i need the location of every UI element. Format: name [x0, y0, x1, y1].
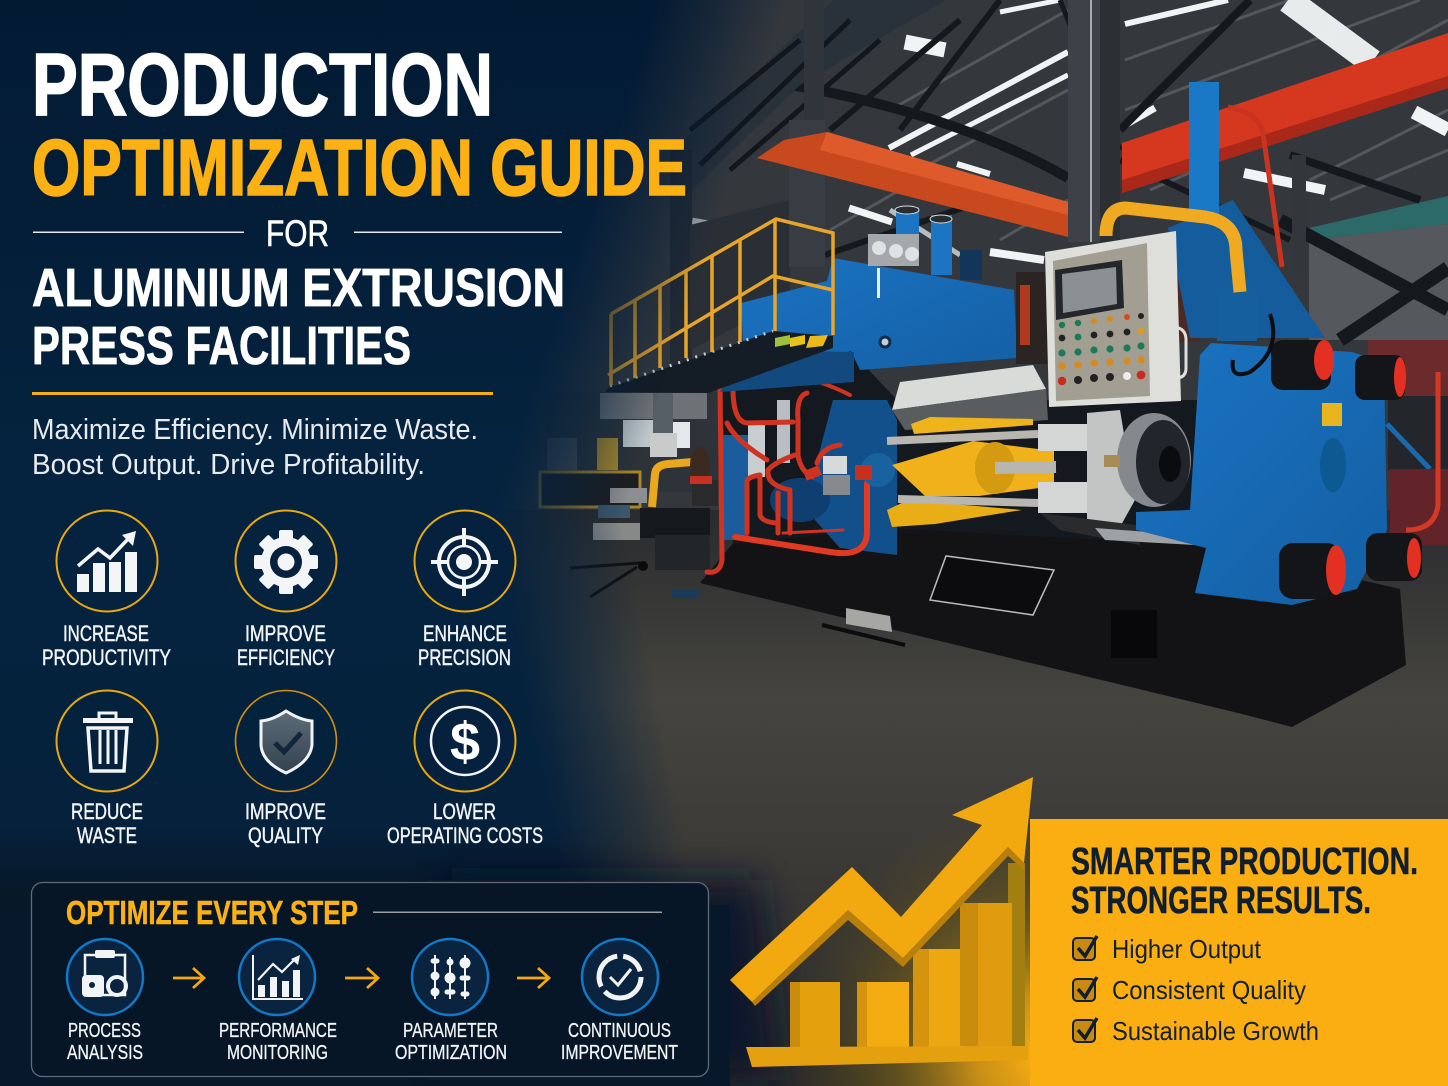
panel: yellow results [1030, 819, 1448, 1086]
benefit: lower operating costs [387, 690, 543, 848]
steel columns [789, 0, 1306, 275]
subtitle [32, 414, 478, 481]
control panel [1045, 231, 1186, 407]
icon: rising bar chart [77, 531, 137, 592]
arrow [345, 968, 378, 988]
teal wall band [1309, 196, 1448, 240]
right blue housing [1136, 343, 1387, 605]
black hose [1233, 314, 1273, 374]
red banner beam [1122, 33, 1448, 193]
benefit: improve quality: QUALITY [248, 823, 323, 848]
arrow underside shading [752, 847, 1024, 1006]
blue vertical cylinders and gauges [868, 206, 982, 280]
bars [790, 903, 1012, 1048]
subtitle: Maximize Efficiency. Minimize Waste. [32, 414, 478, 446]
benefit: improve efficiency: EFFICIENCY [237, 645, 335, 670]
benefit: increase productivity: PRODUCTIVITY [42, 645, 171, 670]
step: performance monitoring: MONITORING [227, 1042, 328, 1064]
step: parameter optimization: OPTIMIZATION [395, 1042, 507, 1064]
background equipment on the left side of the hall [540, 340, 1448, 598]
benefit: enhance precision: ENHANCE [423, 621, 507, 646]
benefit: improve efficiency [236, 510, 336, 670]
access platform with railing [606, 219, 854, 393]
roof panels and lights [670, 0, 1448, 410]
step: parameter optimization: PARAMETER [403, 1020, 498, 1042]
step: continuous improvement: CONTINUOUS [568, 1020, 671, 1042]
icon: cycle with check [599, 956, 641, 998]
yellow crosshead [887, 417, 1054, 527]
benefit: lower operating costs: LOWER [433, 799, 496, 824]
base plate [746, 1046, 1028, 1067]
white carriage [892, 365, 1046, 410]
yellow overhead pipe [1106, 208, 1240, 292]
step: performance monitoring [219, 939, 337, 1064]
benefit: increase productivity: INCREASE [63, 621, 149, 646]
growth arrow and bars [730, 777, 1033, 1067]
upper blue block [741, 258, 1017, 380]
blue strut and top piston [1168, 82, 1325, 341]
benefit: reduce waste: WASTE [77, 823, 137, 848]
title connector word: FOR [266, 213, 329, 254]
step: continuous improvement [561, 939, 678, 1064]
icon: shield with check [261, 711, 312, 773]
left navy overlay panel [0, 0, 768, 1086]
title line 2: OPTIMIZATION GUIDE [32, 123, 687, 212]
black base [700, 527, 1406, 727]
rising arrow [730, 777, 1033, 1002]
benefit: increase productivity [42, 510, 171, 670]
icon: trash bin [83, 713, 133, 771]
step: parameter optimization [395, 939, 507, 1064]
arrow [517, 968, 549, 988]
panel heading: OPTIMIZE EVERY STEP [66, 894, 358, 931]
title line 4: PRESS FACILITIES [32, 316, 411, 376]
step: performance monitoring: PERFORMANCE [219, 1020, 337, 1042]
step: process analysis: ANALYSIS [67, 1042, 143, 1064]
panel: optimize every step [32, 882, 708, 1076]
blue central frame [812, 400, 897, 555]
silver clamps and die ring [1038, 410, 1195, 545]
benefit: enhance precision: PRECISION [418, 645, 511, 670]
title line 3: ALUMINIUM EXTRUSION [32, 258, 565, 318]
icon: dollar coin: $ [450, 712, 480, 772]
benefit: improve quality [236, 690, 336, 848]
benefit: lower operating costs: OPERATING COSTS [387, 823, 543, 848]
checklist item: higher output: Higher Output [1112, 934, 1262, 964]
benefit: reduce waste [56, 690, 158, 848]
extrusion press machine [606, 82, 1422, 727]
silver tie rods [887, 434, 1056, 503]
icon: line and bar chart [253, 955, 303, 999]
checklist item: consistent quality: Consistent Quality [1112, 975, 1306, 1005]
red hydraulic pipes [707, 380, 867, 572]
icon: gear [254, 530, 318, 594]
bottom navy band [440, 880, 780, 1086]
dark interior behind pipes [720, 351, 1200, 545]
valve block [805, 453, 895, 495]
far right tanks and frames [1368, 340, 1448, 396]
arrow [173, 968, 204, 988]
benefit: enhance precision [414, 510, 516, 670]
glow behind growth chart [760, 819, 1040, 1086]
step: process analysis [67, 939, 143, 1064]
icon: sliders [431, 955, 470, 999]
icon: clipboard and gears [82, 950, 126, 997]
step: continuous improvement: IMPROVEMENT [561, 1042, 678, 1064]
step: process analysis: PROCESS [68, 1020, 141, 1042]
back column [1008, 863, 1025, 1047]
benefit: improve quality: IMPROVE [245, 799, 326, 824]
benefit: reduce waste: REDUCE [71, 799, 143, 824]
icon: dollar coin [431, 707, 499, 775]
black hubs with red caps [1271, 340, 1422, 599]
icon: target crosshair [431, 528, 498, 596]
benefit: improve efficiency: IMPROVE [245, 621, 326, 646]
machinery behind control panel [1016, 232, 1200, 364]
subtitle: Boost Output. Drive Profitability. [32, 449, 425, 481]
title line 1: PRODUCTION [32, 35, 493, 134]
orange crane beam [757, 132, 1068, 237]
steel truss [670, 0, 946, 410]
checklist item: sustainable growth: Sustainable Growth [1112, 1016, 1319, 1046]
title block [32, 35, 687, 376]
